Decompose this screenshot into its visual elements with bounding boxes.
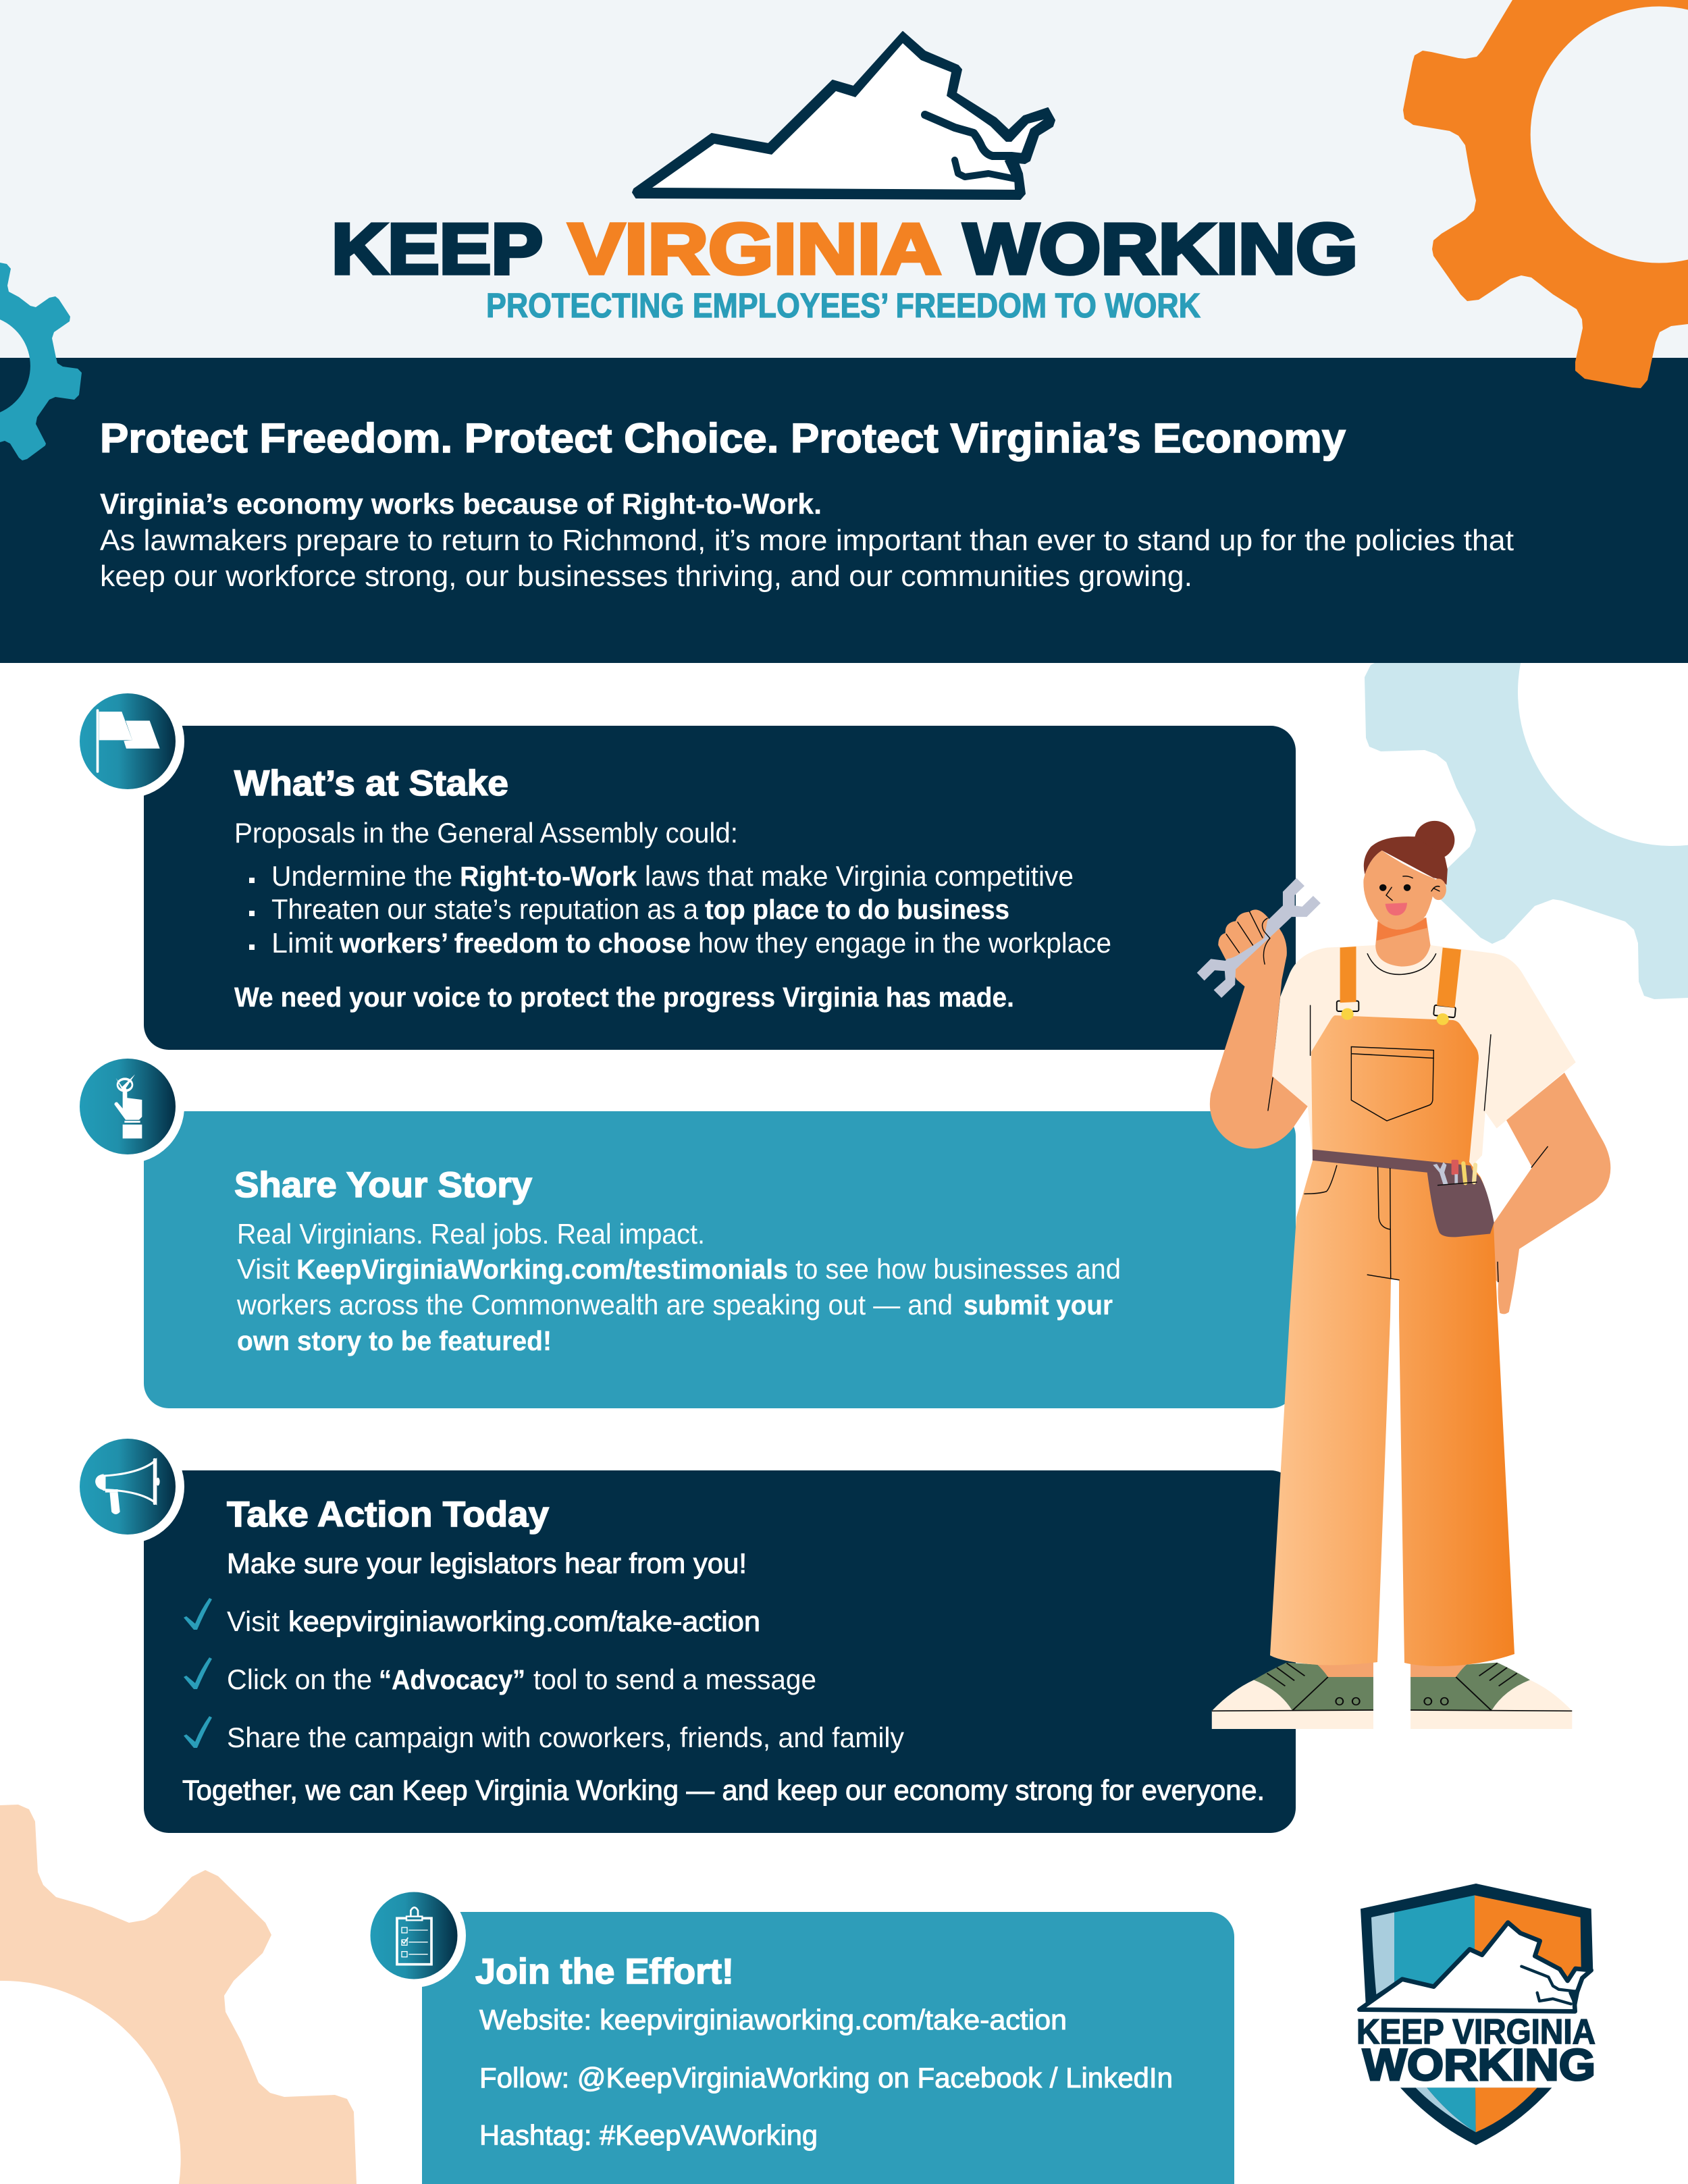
icon: clipboard [362,1884,466,1988]
story paragraph: KeepVirginiaWorking.com/testimonials [296,1254,788,1285]
illustration: worker with wrench [1197,821,1610,1729]
bullet list: workers’ freedom to choose [339,928,691,959]
icon: megaphone [71,1430,184,1543]
decorative gear: teal [0,263,82,460]
arms and shirt [1197,878,1610,1314]
subtitle: PROTECTING EMPLOYEES’ FREEDOM TO WORK [486,286,1201,325]
heading: take action: Take Action Today [227,1495,550,1535]
panel: share your story [144,1111,1296,1408]
decorative gear: orange [1403,0,1688,388]
logo: Keep Virginia Working shield [1356,1884,1595,2145]
action list [227,1605,904,1753]
bullet list: Right-to-Work [460,861,637,892]
action list: “Advocacy” [379,1664,525,1695]
text: closing line: Together, we can Keep Virginia Working — and keep our economy strong for everyone. [182,1774,1265,1806]
title: KEEP [332,209,543,289]
logo text: KEEP VIRGINIA [1356,2013,1595,2052]
decorative gear: peach [0,1805,357,2184]
intro paragraph: As lawmakers prepare to return to Richmond, it’s more important than ever to stand up for the policies that [100,524,1514,557]
bullet list: top place to do business [705,894,1009,925]
heading: what's at stake: What’s at Stake [234,764,508,803]
decorative gear: light blue [1365,662,1688,999]
text: call to voice: We need your voice to protect the progress Virginia has made. [234,982,1014,1013]
panel: take action today [144,1470,1296,1833]
story paragraph: workers across the Commonwealth are speaking out — and [236,1289,953,1321]
story paragraph: Real Virginians. Real jobs. Real impact. [237,1218,705,1250]
panel: join the effort [422,1912,1234,2184]
intro band [0,358,1688,663]
story paragraph: to see how businesses and [795,1253,1121,1285]
contact lines: Follow: @KeepVirginiaWorking on Facebook / LinkedIn [479,2062,1173,2094]
icon: flag [71,685,184,798]
heading: share your story: Share Your Story [234,1165,533,1205]
bullet list: Limit [271,927,333,959]
panel: what's at stake [144,726,1296,1050]
icons: check marks [184,1598,212,1748]
intro paragraph: keep our workforce strong, our businesses thriving, and our communities growing. [100,560,1192,593]
logo text: WORKING [1363,2040,1595,2089]
story paragraph: own story to be featured! [237,1325,552,1356]
bullet list: laws that make Virginia competitive [645,860,1074,892]
overalls details, head and tool pouch [1304,821,1494,1280]
action list: Click on the [227,1663,372,1695]
intro paragraph: Virginia’s economy works because of Right-to-Work. [100,488,822,521]
intro paragraph [100,488,1514,593]
story paragraph: submit your [964,1289,1113,1321]
overalls [1270,1015,1514,1666]
bullet list [249,860,1111,959]
title: VIRGINIA [569,209,941,289]
heading: join the effort: Join the Effort! [475,1952,734,1992]
title: WORKING [964,209,1358,289]
story paragraph [236,1218,1121,1356]
contact lines: Hashtag: #KeepVAWorking [479,2119,818,2151]
action list: tool to send a message [533,1663,816,1695]
intro heading: Protect Freedom. Protect Choice. Protect Virginia’s Economy [100,415,1346,461]
icon: hand voting [71,1050,184,1163]
contact lines [479,2004,1173,2151]
text: proposals intro: Proposals in the General Assembly could: [234,817,738,849]
action list: Share the campaign with coworkers, friends, and family [227,1722,904,1753]
bullet list: how they engage in the workplace [698,927,1111,959]
title [332,209,1358,289]
bullet list: Undermine the [271,860,452,892]
logo text [1356,2013,1595,2089]
header background [0,0,1688,358]
action list: Visit [227,1605,280,1637]
shoes [1212,1662,1572,1729]
bullet list: Threaten our state’s reputation as a [271,893,699,925]
action list: keepvirginiaworking.com/take-action [288,1605,760,1637]
contact lines: Website: keepvirginiaworking.com/take-action [479,2004,1067,2035]
story paragraph: Visit [237,1253,290,1285]
text: legislators: Make sure your legislators hear from you! [227,1547,747,1579]
icon: Virginia state outline [633,32,1055,199]
